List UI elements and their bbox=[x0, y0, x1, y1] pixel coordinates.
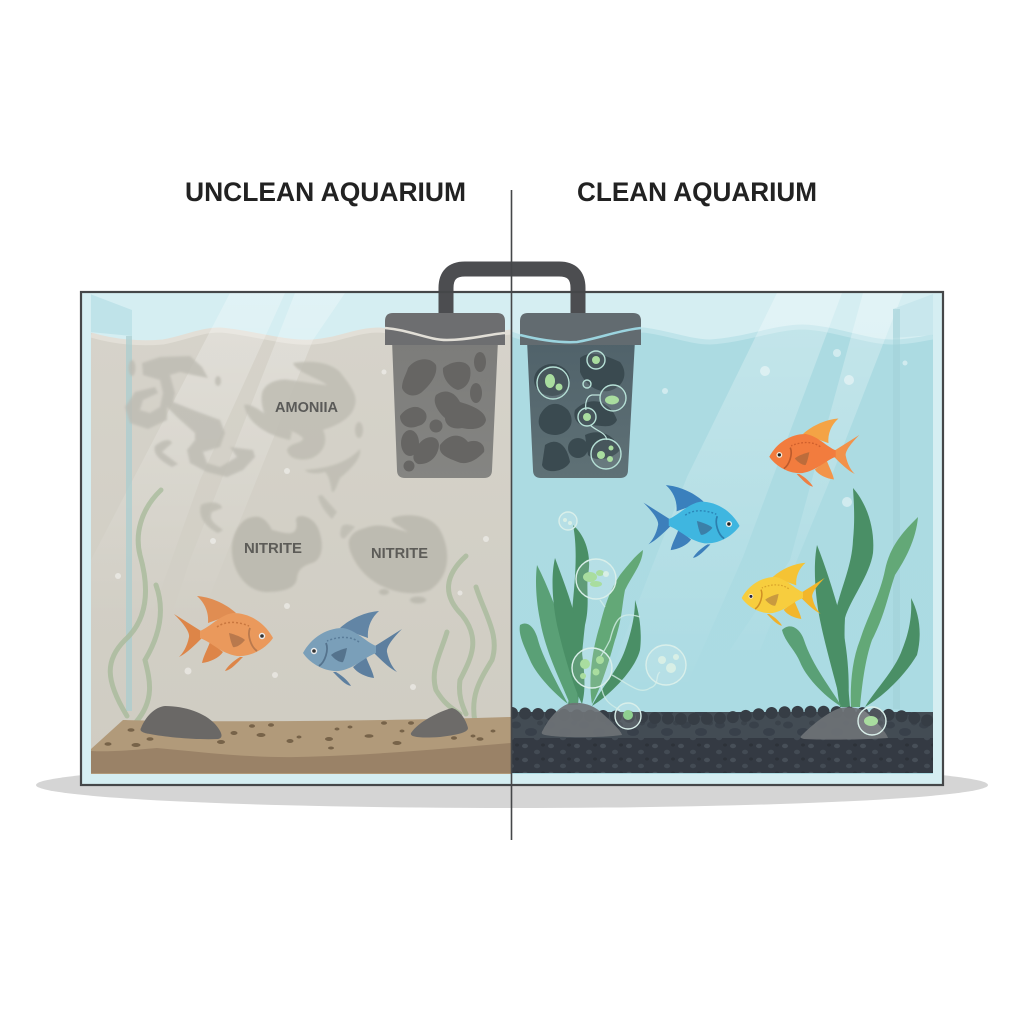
label: nitrite 2: NITRITE bbox=[371, 545, 428, 562]
filter: clean side bbox=[520, 313, 641, 478]
tank outline bbox=[81, 292, 943, 785]
rock: left small bbox=[411, 708, 468, 738]
rock: right-side right bbox=[801, 707, 888, 740]
plant: clean left bbox=[520, 525, 643, 706]
smoke: ammonia blob bbox=[200, 362, 363, 538]
fish: orange, clean side bbox=[769, 419, 859, 487]
label: nitrite 1: NITRITE bbox=[244, 540, 302, 557]
smoke: nitrite blob 1 bbox=[232, 516, 322, 592]
filter media, right bbox=[534, 354, 624, 471]
rock: right-side left bbox=[542, 703, 622, 737]
filter body, left bbox=[392, 340, 498, 478]
water surface band, left bbox=[91, 330, 511, 343]
fish: yellow, clean side bbox=[742, 563, 825, 626]
small air bubbles bbox=[115, 349, 908, 690]
left glass side panel bbox=[90, 294, 132, 711]
fish: grey-blue, unclean side bbox=[303, 611, 402, 686]
plants: pale right cluster bbox=[434, 556, 494, 722]
light rays, left bbox=[154, 293, 344, 440]
filter lid, left bbox=[385, 313, 505, 345]
water line on filter bbox=[385, 328, 505, 340]
center divider line bbox=[510, 190, 512, 840]
bubbles: bacteria on plants and gravel bbox=[559, 512, 886, 735]
label: ammonia: AMONIIA bbox=[275, 400, 339, 416]
smoke: ammonia swirl bbox=[125, 356, 255, 477]
water surface band, right bbox=[511, 327, 933, 344]
panel: aquarium tank glass bbox=[81, 292, 943, 785]
right glass side panel bbox=[893, 294, 933, 344]
infographic: aquarium comparison bbox=[36, 182, 988, 840]
fish: blue, clean side bbox=[644, 485, 740, 558]
plants: pale left cluster bbox=[110, 490, 161, 722]
filter handle bbox=[446, 269, 578, 318]
plant: clean right bbox=[782, 488, 920, 707]
smoke: nitrite blob 2 bbox=[349, 515, 447, 604]
filter media, left bbox=[400, 352, 486, 472]
panel: unclean aquarium water bbox=[90, 293, 511, 774]
tank shadow bbox=[36, 762, 988, 808]
light rays, right bbox=[658, 293, 902, 555]
rock: left large bbox=[140, 706, 222, 739]
filter lid, right bbox=[520, 313, 641, 345]
substrate: clean gravel bbox=[512, 712, 933, 773]
filter body, right bbox=[527, 340, 635, 478]
water line on filter bbox=[520, 328, 641, 342]
fish: orange, unclean side bbox=[174, 596, 273, 671]
heading: unclean aquarium: UNCLEAN AQUARIUM bbox=[185, 177, 466, 207]
substrate: unclean sand bbox=[91, 717, 511, 774]
filter: unclean side bbox=[385, 269, 578, 478]
panel: clean aquarium water bbox=[511, 293, 933, 774]
bubbles: bacteria in filter bbox=[537, 351, 626, 469]
heading: clean aquarium: CLEAN AQUARIUM bbox=[577, 177, 817, 207]
